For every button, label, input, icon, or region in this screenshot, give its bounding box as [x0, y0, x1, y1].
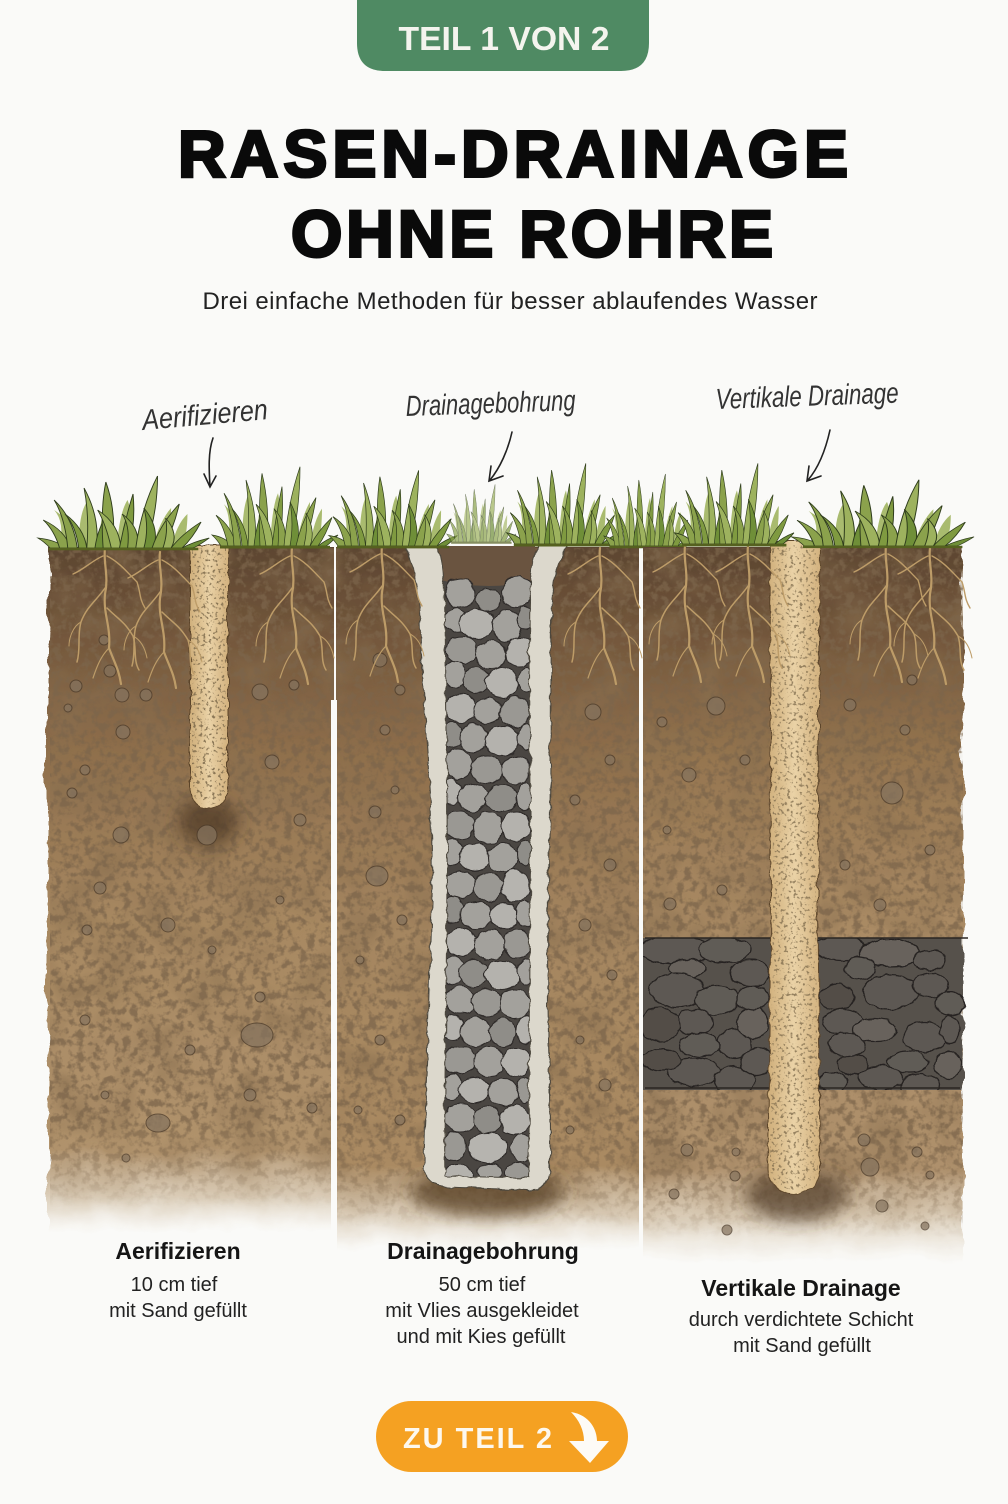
badge: Teil 1 von 2 [357, 0, 649, 71]
arrow: Aerifizieren [204, 438, 216, 487]
title: RASEN-DRAINAGE [178, 116, 848, 190]
soil body [625, 530, 963, 1275]
grass [674, 463, 974, 547]
handwritten label: Vertikale Drainage: Vertikale Drainage [715, 378, 899, 416]
dark soil around column bottom [747, 1169, 847, 1221]
caption: Aerifizieren: mit Sand gefüllt [109, 1300, 247, 1322]
subtitle: Drei einfache Methoden für besser ablaufendes Wasser [202, 288, 818, 315]
caption: Aerifizieren: 10 cm tief [131, 1274, 218, 1296]
button: Zu Teil 2 [376, 1401, 628, 1472]
roots [346, 546, 642, 684]
caption: Drainagebohrung: Drainagebohrung [387, 1238, 579, 1264]
soil body [48, 530, 348, 1240]
gravel hole background [442, 546, 534, 1180]
grass [329, 463, 692, 547]
caption: Drainagebohrung: und mit Kies gefüllt [397, 1326, 566, 1348]
handwritten label: Drainagebohrung: Drainagebohrung [405, 385, 576, 423]
panel: Drainagebohrung soil cross-section [320, 463, 692, 1265]
button: Zu Teil 2: ZU TEIL 2 [403, 1423, 552, 1455]
arrow: Vertikale Drainage [807, 430, 830, 481]
badge: Teil 1 von 2: TEIL 1 VON 2 [398, 20, 610, 57]
arrow: Drainagebohrung [489, 432, 512, 481]
compacted dark layer [643, 937, 968, 1090]
title [178, 116, 848, 270]
panel: Aerifizieren soil cross-section [38, 467, 348, 1240]
gravel stones [441, 576, 534, 1184]
sand column [768, 541, 820, 1194]
soil body [336, 547, 639, 1246]
caption: Drainagebohrung [385, 1238, 579, 1348]
caption: Vertikale Drainage [689, 1275, 914, 1357]
title: OHNE ROHRE [291, 196, 773, 270]
caption: Drainagebohrung: mit Vlies ausgekleidet [385, 1300, 579, 1322]
caption: Vertikale Drainage: durch verdichtete Schicht [689, 1309, 914, 1331]
caption: Vertikale Drainage: mit Sand gefüllt [733, 1335, 871, 1357]
roots [649, 546, 972, 684]
icon: curved down arrow [569, 1412, 609, 1463]
roots [69, 548, 334, 688]
grass [38, 467, 338, 549]
caption: Drainagebohrung: 50 cm tief [439, 1274, 526, 1296]
fleece liner [400, 535, 579, 1190]
pebbles [64, 635, 317, 1162]
caption: Vertikale Drainage: Vertikale Drainage [701, 1275, 901, 1301]
sand column [190, 545, 228, 809]
handwritten label: Aerifizieren: Aerifizieren [139, 394, 269, 437]
panel: Vertikale Drainage soil cross-section [625, 463, 974, 1275]
pebbles [354, 653, 617, 1134]
caption: Aerifizieren [109, 1238, 247, 1322]
soil cap at top of hole [440, 546, 535, 586]
caption: Aerifizieren: Aerifizieren [115, 1238, 241, 1264]
pebbles [657, 675, 935, 1235]
